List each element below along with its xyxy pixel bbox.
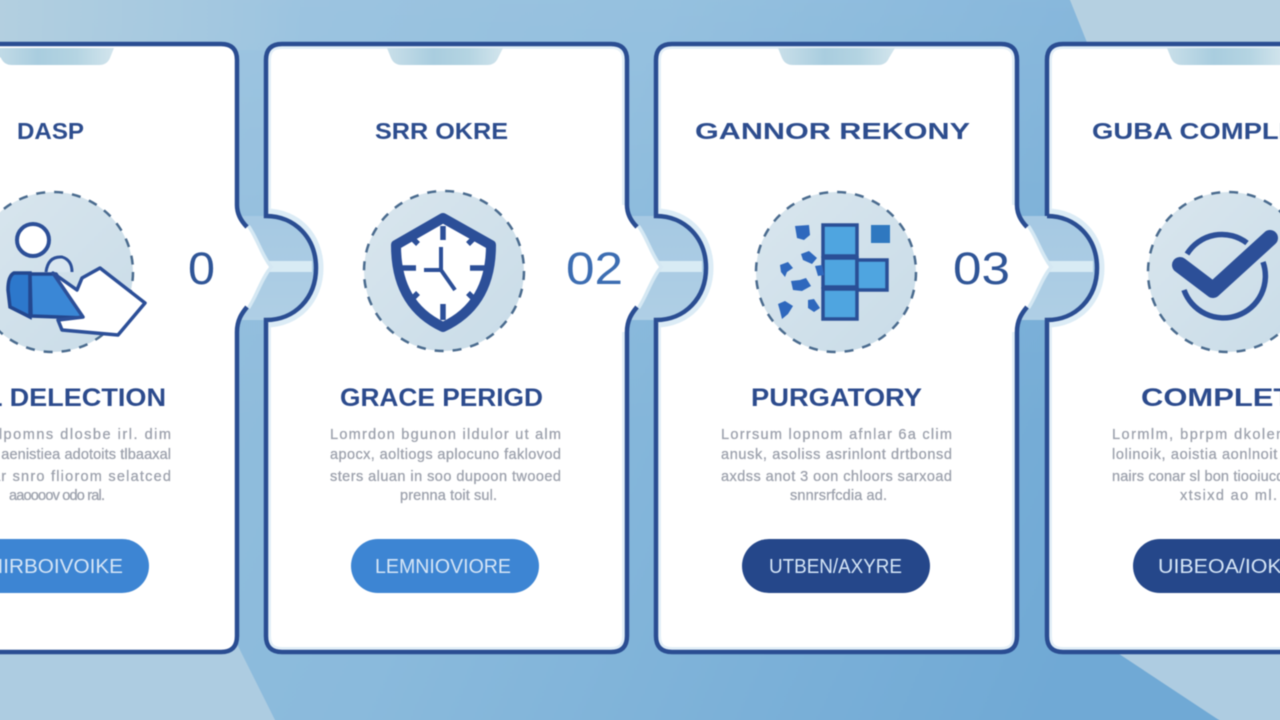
button: LEMNIOVIORE (375, 556, 511, 578)
body text: xtsixd ao ml. (1180, 488, 1277, 504)
top heading: DASP (17, 118, 84, 144)
icon: fragmenting blocks (756, 192, 916, 352)
top tab (387, 48, 503, 65)
button (0, 539, 149, 593)
body text: snnrsrfcdia ad. (790, 488, 887, 504)
button (351, 539, 539, 593)
body text: anusk, asoliss asrinlont drtbonsd (721, 447, 952, 463)
button: UTBEN/AXYRE (769, 556, 902, 578)
card 3 shape (630, 44, 1049, 652)
body text (330, 427, 561, 504)
body text: apocx, aoltiogs aplocuno faklovod (330, 447, 561, 463)
body text: Lorrsum lopnom afnlar 6a clim (721, 427, 952, 443)
panel: card 2 grace period (240, 44, 659, 652)
button (1133, 539, 1280, 593)
icon: hand selecting person (0, 192, 145, 352)
body text: Lomrdon bgunon ildulor ut alm (330, 427, 561, 443)
panel: card 4 complete (1021, 44, 1280, 652)
top tab (1167, 48, 1280, 65)
top heading: SRR OKRE (375, 118, 508, 144)
card 1 shape (0, 44, 269, 652)
body text: aaoooov odo ral. (9, 488, 105, 504)
button (742, 539, 930, 593)
body text (1112, 427, 1280, 504)
top heading: GANNOR REKONY (695, 118, 970, 144)
top tab (0, 48, 114, 65)
panel: card 3 purgatory (630, 44, 1049, 652)
bottom heading: PURGATORY (751, 384, 922, 412)
body text (721, 427, 952, 504)
top heading: GUBA COMPLE (1092, 118, 1280, 144)
step number: 0 (188, 243, 215, 294)
bottom heading: GRACE PERIGD (340, 384, 543, 412)
body text: axdss anot 3 oon chloors sarxoad (721, 469, 952, 485)
card 2 shape (240, 44, 659, 652)
body text: prenna toit sul. (400, 488, 497, 504)
top tab (778, 48, 895, 65)
body text (0, 427, 171, 504)
panel: card 1 selection (0, 44, 269, 652)
step number: 02 (566, 243, 623, 294)
icon: check mark (1148, 192, 1280, 352)
step number: 03 (953, 243, 1010, 294)
bottom heading: COMPLETE (1141, 384, 1280, 412)
icon: shield clock (364, 191, 524, 351)
card 4 shape (1021, 44, 1280, 652)
body text: sters aluan in soo dupoon twooed (330, 469, 561, 485)
